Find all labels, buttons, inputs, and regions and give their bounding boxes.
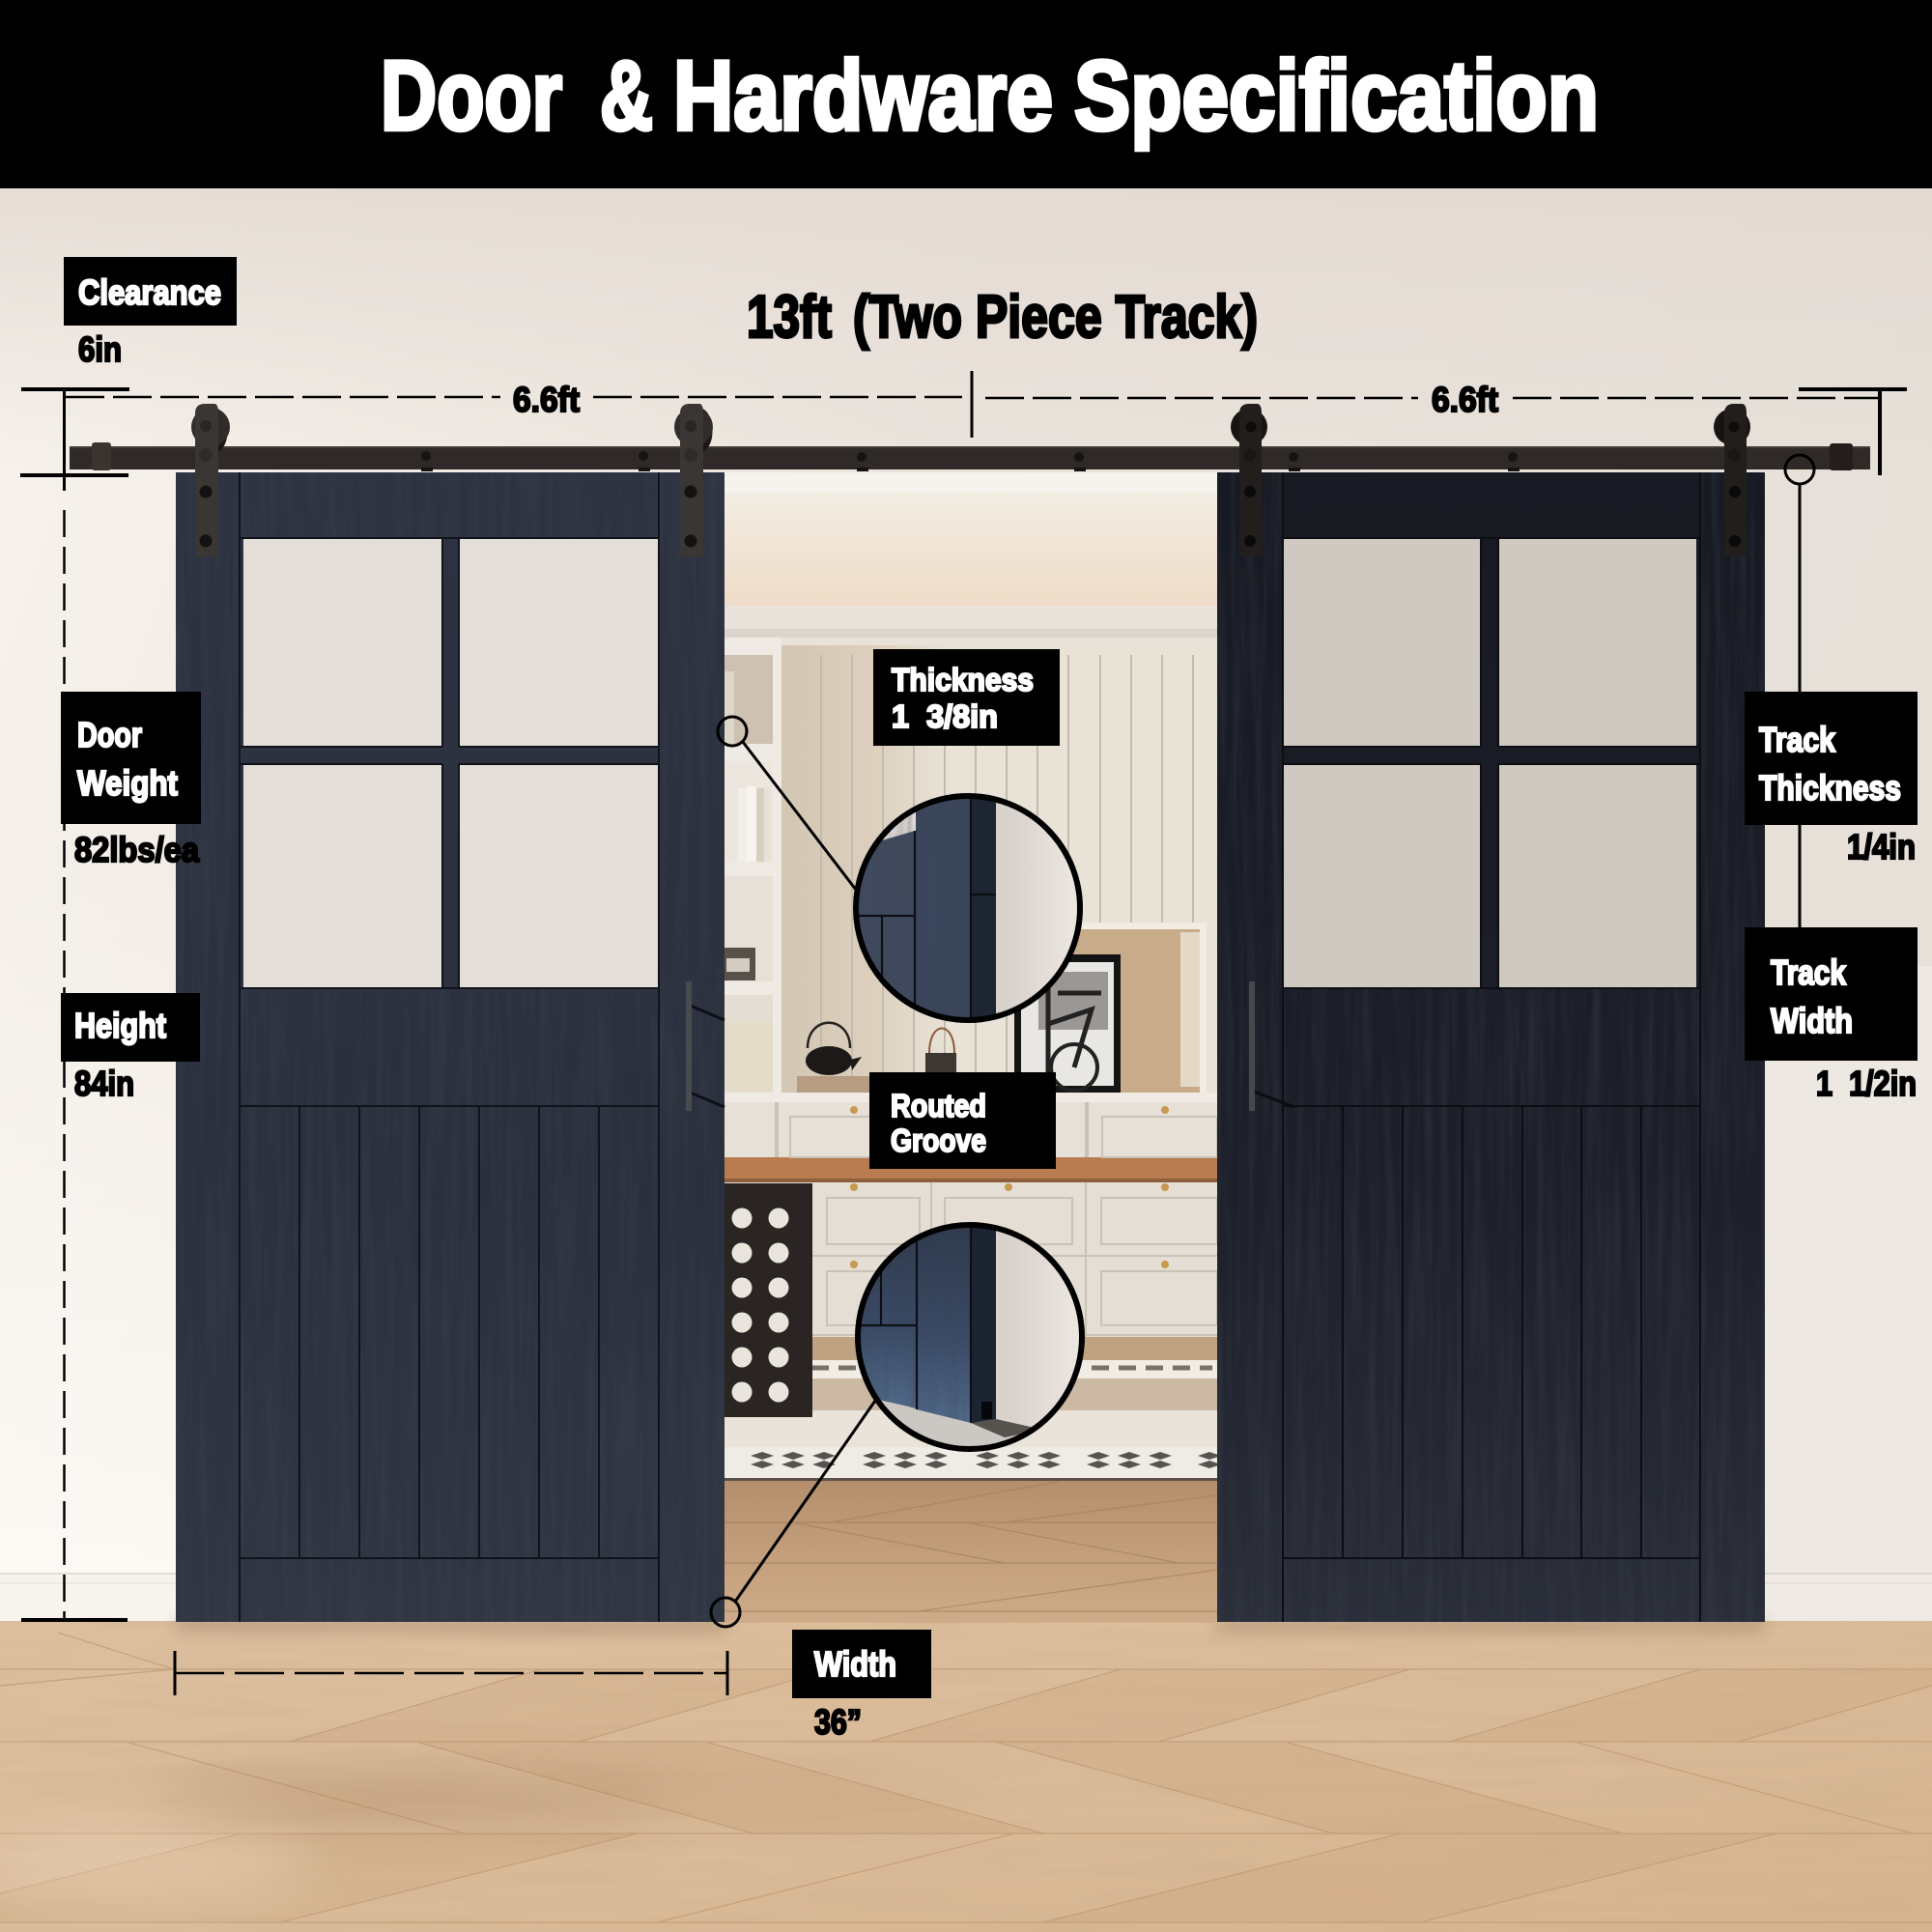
interior: cabinets and countertop [724,1093,1217,1362]
title: Specification [1074,41,1599,151]
right door: handle [1249,981,1294,1111]
track detail pointer [1785,455,1814,927]
interior: floor [724,1481,1217,1623]
detail callout: routed groove pointer [711,1401,875,1627]
label: door weight: Weight [77,763,178,803]
left track section label: 6.6ft [513,380,580,419]
left door: wood grain [176,472,724,1622]
label: routed groove: Routed [891,1088,986,1123]
label: door weight [61,692,201,869]
detail lens: routed groove close-up [858,1225,1082,1454]
label: height: 84in [74,1064,134,1103]
interior: framed bicycle photo and canvas [1014,923,1207,1094]
interior: rug [724,1360,1221,1481]
title [381,41,1599,151]
interior: perforated black panel [724,1183,812,1417]
label: track thickness: Thickness [1759,768,1901,808]
hanger straps and wheels [191,404,1750,557]
label: door weight: 82lbs/ea [74,830,200,869]
label: track thickness: 1/4in [1847,827,1916,867]
header bar [0,0,1932,188]
track: end stoppers [92,442,1853,470]
right track section label: 6.6ft [1432,380,1498,419]
label: clearance: 6in [78,329,122,369]
right door: wood grain [1217,472,1765,1622]
left barn door [176,472,724,1622]
label: thickness: Thickness [892,662,1034,697]
label: track width [1745,927,1918,1103]
label: track width: Track [1771,952,1847,992]
interior: teapots and tray [797,1023,956,1094]
label: track thickness [1745,692,1918,867]
floor: herringbone wood [0,1621,1932,1932]
left door: glass panes [243,538,659,988]
label: track width: Width [1771,1001,1853,1040]
label: thickness [873,649,1060,746]
track length dimension lines [66,371,1907,475]
label: routed groove: Groove [891,1122,986,1158]
label: clearance: Clearance [78,272,221,312]
label: width: Width [814,1644,896,1684]
track total length heading: 13ft [747,284,832,351]
label: routed groove [869,1072,1056,1169]
left door: handle [686,981,724,1111]
right barn door [1217,472,1765,1622]
interior room seen through the opening [724,472,1221,1623]
label: width: 36” [814,1702,862,1742]
door width dimension line [175,1651,727,1695]
title: Hardware [673,41,1053,151]
label: track thickness: Track [1759,720,1836,759]
track: bolts [421,451,1520,471]
label: height [61,993,200,1103]
right door: glass panes [1283,538,1696,988]
label: width [792,1630,931,1742]
label: thickness: 1 3/8in [892,698,998,734]
hanger 1 [191,404,230,557]
label: door weight: Door [77,715,142,754]
baseboards [0,1573,1932,1623]
track total length heading: (Two Piece Track) [853,284,1258,351]
left door: grooves [240,472,659,1622]
wall background [0,188,1932,1628]
right door: grooves [1283,472,1700,1622]
label: track width: 1 1/2in [1816,1064,1917,1103]
title: & [600,41,653,151]
hanger 2 [674,404,713,557]
label: height: Height [74,1006,166,1045]
detail lens: door thickness close-up [856,796,1080,1020]
title: Door [381,41,562,151]
label: clearance [64,257,237,369]
interior: paneled back wall [781,645,1217,1094]
hanger 4 [1714,404,1750,556]
hanger 3 [1231,404,1267,556]
detail callout: thickness pointer [718,717,856,890]
barn door track [70,442,1870,471]
interior: bookshelf [724,638,781,1099]
track total length heading [747,284,1258,351]
clearance and height dimension lines [20,389,129,1620]
